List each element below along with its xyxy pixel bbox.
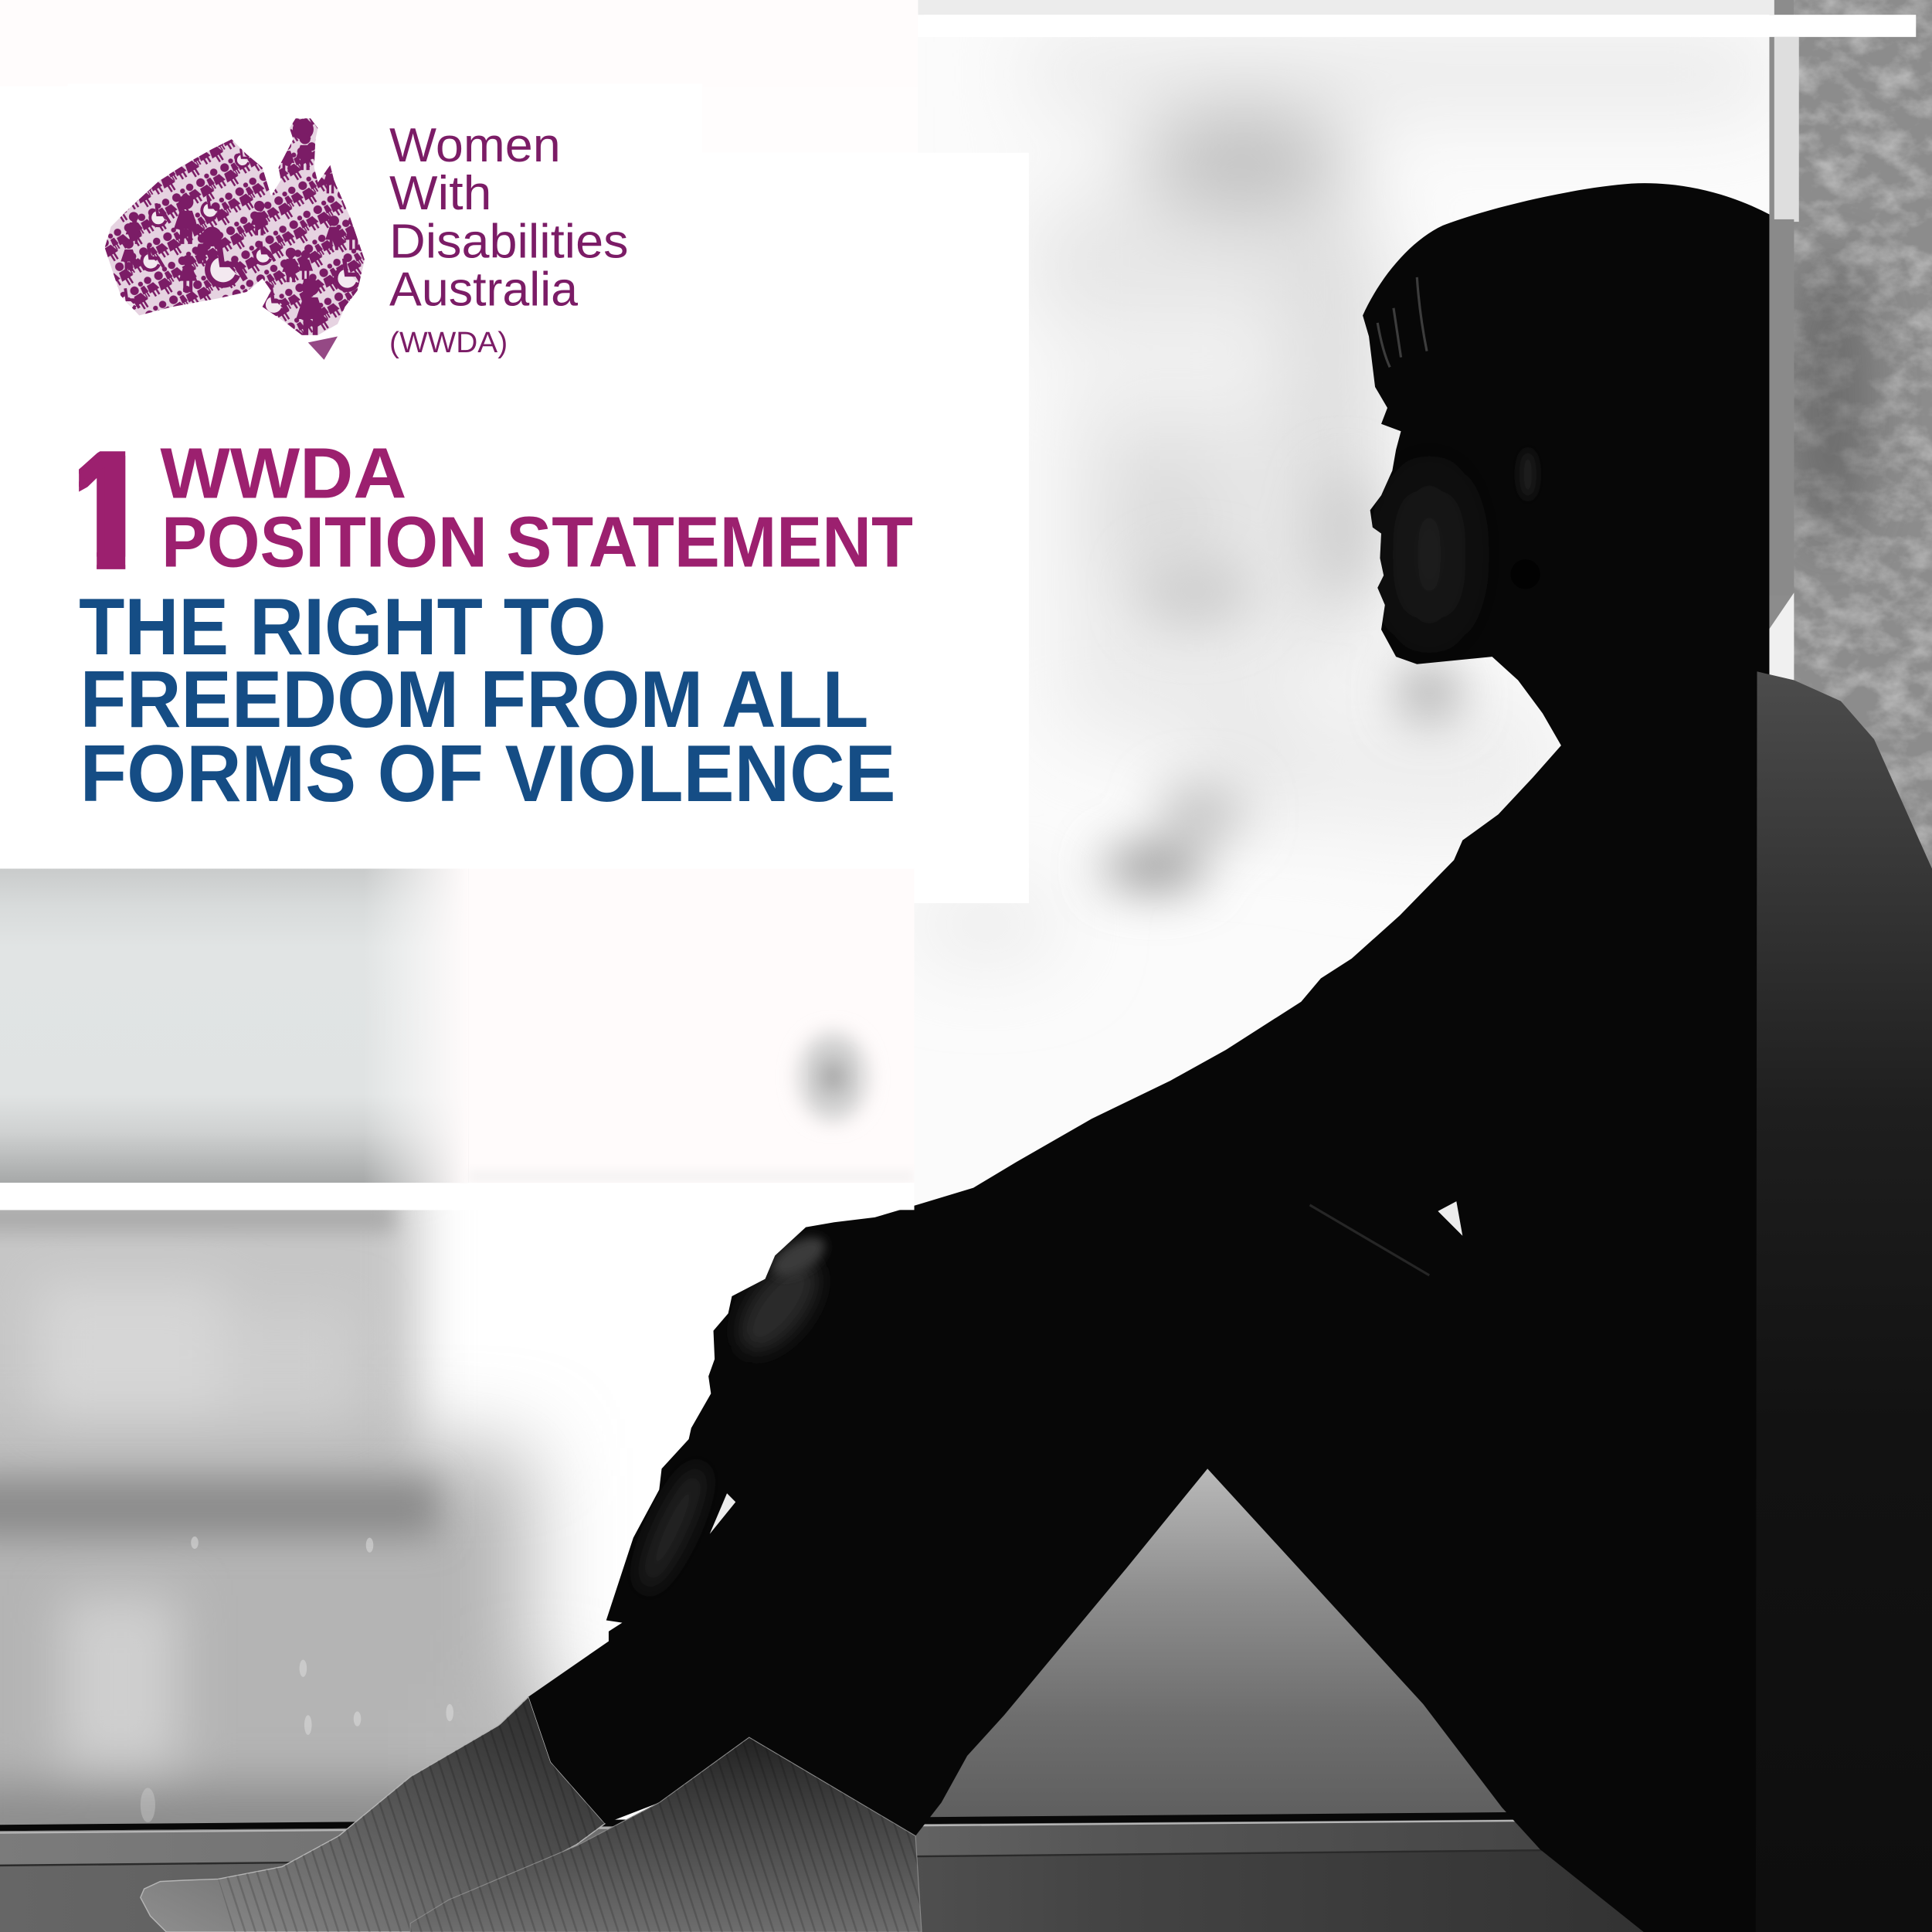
- heading: title: FREEDOM FROM ALL: [80, 654, 868, 744]
- logo wordmark: Women: [389, 119, 561, 172]
- window glass between the legs: [863, 1454, 1602, 1824]
- blurred spot: [799, 1033, 868, 1121]
- logo wordmark: (WWDA): [389, 326, 508, 359]
- earring: [1511, 559, 1540, 589]
- heading: statement number and label: [79, 448, 912, 569]
- curtain: [1754, 0, 1932, 936]
- logo wordmark: Australia: [389, 263, 578, 317]
- photo: blurred window, lower left: [0, 1210, 592, 1825]
- hair strands: [1377, 277, 1427, 367]
- heading: title: FORMS OF VIOLENCE: [80, 728, 896, 818]
- logo wordmark: [389, 119, 628, 359]
- logo wordmark: With: [389, 167, 491, 220]
- logo: WWDA: [99, 111, 628, 360]
- crease in trousers: [1310, 1205, 1429, 1275]
- raindrops: [141, 1536, 453, 1822]
- photo: blurred window, upper right: [915, 37, 1769, 980]
- heading: statement number and label: 1: [56, 421, 160, 605]
- top white strip: [918, 0, 1916, 37]
- gaps of light through the body: [710, 1201, 1462, 1534]
- soft highlights on face and hands: [629, 450, 1536, 1597]
- heading: title: THE RIGHT TO: [79, 582, 606, 671]
- icon: map of Australia made of figures: [99, 111, 370, 360]
- curtain shadow: [1788, 253, 1872, 548]
- heading: statement number and label: WWDA: [160, 433, 406, 513]
- icon: Tasmania: [308, 336, 338, 360]
- photo: pale panel with grey pane, middle left: [0, 868, 915, 1183]
- white strip across the left: [0, 1183, 915, 1210]
- window sill: [0, 1811, 1774, 1932]
- sock: left foot: [141, 1696, 605, 1932]
- woman silhouette: [528, 183, 1769, 1932]
- panel: white title card: [0, 0, 1029, 903]
- logo wordmark: Disabilities: [389, 215, 628, 268]
- heading: title: [79, 582, 896, 818]
- lit shoulder against the wall: [1756, 671, 1932, 1932]
- heading: statement number and label: POSITION STATEMENT: [161, 502, 913, 582]
- curtain bright edge: [1774, 37, 1799, 222]
- sock: right foot: [410, 1737, 922, 1932]
